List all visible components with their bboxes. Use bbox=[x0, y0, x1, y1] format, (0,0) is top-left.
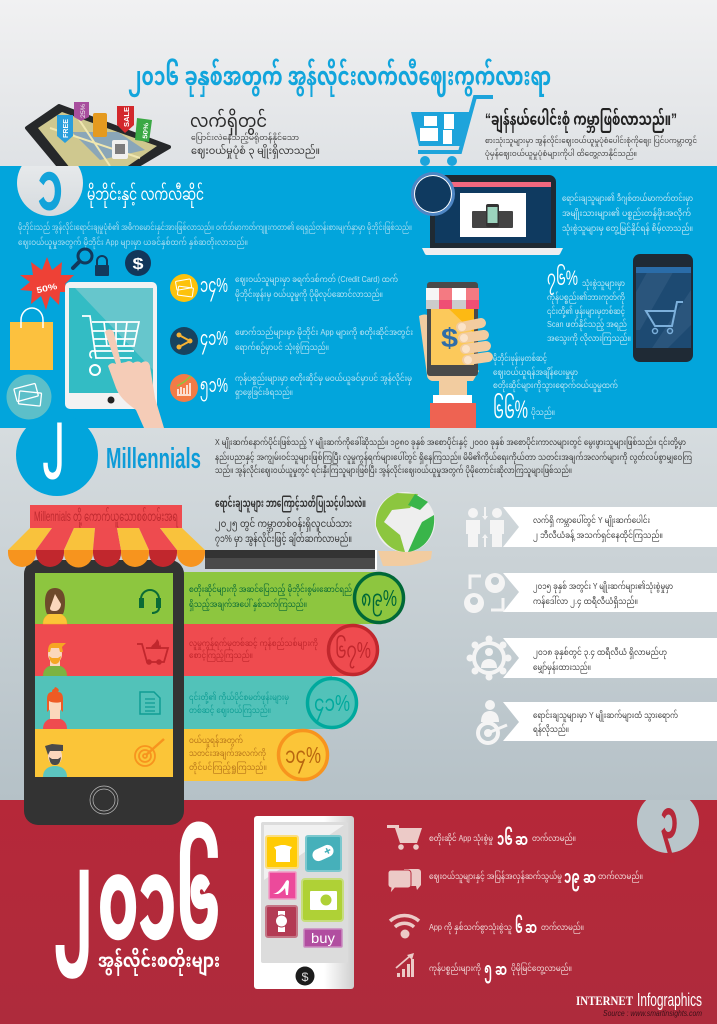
stat: 66 percent: စတိုးဆိုင်များကိုသွားရောက်ဝယ်ယူမှုထက် bbox=[493, 378, 618, 393]
fact: 2018 forecast: မျှော်မှန်းထားသည်။ bbox=[533, 661, 591, 675]
stat: 66 percent: ဈေးဝယ်ယူရန်အချိန်ပေးမှုမှာ bbox=[493, 365, 578, 380]
icon: headset bbox=[140, 590, 160, 613]
stat: 66 percent bbox=[493, 351, 618, 424]
awning sign text: Millennials တို့ ကောက်ယူသောစစ်တမ်းအရ bbox=[34, 506, 179, 528]
bar: 14 percent: သတင်းအချက်အလက်ကို bbox=[189, 746, 266, 761]
icon: dollar coin bbox=[125, 250, 151, 276]
panel: millennials bbox=[0, 402, 717, 825]
item: preferred app use: ၆ bbox=[515, 915, 523, 937]
item: customer interaction bbox=[388, 867, 643, 894]
text: omni-channel quote: ပုံမှန်ဈေးဝယ်ယူမှုပုံစံများကိုပါ ထိတွေ့လာနိုင်သည်။ bbox=[485, 148, 637, 160]
stat: 14 percent: ဈေးဝယ်သူများမှာ ခရက်ဒစ်ကတ် (Credit Card) ထက် bbox=[235, 273, 398, 287]
icon: tablet with apps bbox=[254, 816, 354, 989]
stat: 14 percent: ၁၄% bbox=[200, 275, 228, 301]
icon: shop awning bbox=[8, 505, 205, 568]
bar: 41 percent: ၄၁% bbox=[314, 690, 350, 722]
stat: 51 percent: ၅၁% bbox=[200, 375, 228, 401]
item: store app use: ၁၆ bbox=[497, 827, 513, 849]
section number 2: ၂ bbox=[42, 402, 64, 480]
section number 2 bbox=[16, 402, 98, 496]
bar: 41 percent bbox=[173, 676, 356, 729]
icon: tablet with apps: $ bbox=[302, 970, 309, 984]
icon: 50 percent burst: 50% bbox=[35, 281, 59, 295]
app label: buy: buy bbox=[311, 930, 335, 946]
icon: magnifier bbox=[73, 249, 92, 268]
bar: 89 percent: ရှိသည့်အချက်အပေါ် နှစ်သက်ကြသည်။ bbox=[189, 597, 307, 612]
icon: laptop bbox=[411, 172, 563, 255]
text: omni-channel quote bbox=[485, 107, 697, 160]
text: seller digital marketing: အမျိုးသားများ၏ ပစ္စည်းတန်ဖိုးအလိုက် bbox=[562, 206, 691, 221]
avatar: man with grey beard bbox=[43, 744, 67, 777]
section number 3: ၃ bbox=[660, 790, 678, 863]
footer: Internet Infographics logo bbox=[576, 990, 702, 1010]
stat: 14 percent: မိုဘိုင်းဖုန်းမှ ဝယ်ယူမှုကို ပိုမိုလုပ်ဆောင်လာသည်။ bbox=[235, 287, 383, 301]
icon: tablet with cart bbox=[65, 282, 157, 409]
bar: 89 percent: ၈၉% bbox=[361, 585, 397, 617]
stat: 76 percent: ၇၆% bbox=[547, 263, 578, 295]
stat: 66 percent: ၆၆% bbox=[493, 392, 528, 424]
big year: ၂ bbox=[54, 835, 92, 978]
icon: phone with shopping tags: SALE bbox=[124, 107, 131, 127]
item: customer interaction: တက်လာမည်။ bbox=[598, 870, 643, 883]
bar: 67 percent bbox=[173, 624, 378, 676]
bar: 67 percent: လူမှုကွန်ရက်မှတစ်ဆင့် ကုန်စည်သစ်များကို bbox=[189, 636, 318, 651]
stat: 76 percent bbox=[547, 263, 631, 345]
stat: 51 percent bbox=[170, 371, 412, 402]
icon: phone with shopping tags: 50% bbox=[142, 122, 150, 139]
item: preferred app use: App ကို နှစ်သက်စွာသုံးစွဲသူ bbox=[429, 920, 512, 934]
panel: online stores 2016 bbox=[0, 786, 717, 1024]
stat: 51 percent: ရှာဖွေခြင်းခံရသည်။ bbox=[235, 386, 293, 399]
heading: mobile and retail: မိုဘိုင်းနှင့် လက်လီဆိုင် bbox=[87, 183, 204, 209]
text: current trends: ဈေးဝယ်မှုပုံစံ ၃ မျိုးရှိလာသည်။ bbox=[191, 143, 320, 159]
icon: shopping bag bbox=[10, 308, 53, 370]
bar: 14 percent: ဝယ်ယူရန်အတွက် bbox=[189, 734, 243, 747]
text: why sellers should care: ရောင်းချသူများ ဘာကြောင့်သတိပြုသင့်ပါသလဲ။ bbox=[215, 493, 366, 514]
bar: 14 percent bbox=[173, 729, 328, 781]
icon: dollar coin: $ bbox=[132, 256, 144, 273]
bar: 41 percent: ၎င်းတို့၏ ကိုယ်ပိုင်စမတ်ဖုန်းများမှ bbox=[189, 690, 289, 705]
icon: lock bbox=[95, 256, 109, 276]
avatar: woman with red hair bbox=[43, 687, 67, 729]
icon: checklist bbox=[140, 692, 160, 714]
fact: 2015 spending bbox=[464, 573, 717, 613]
item: product views bbox=[396, 953, 572, 983]
fact: 2015 spending: ကန်ဒေါ်လာ ၂.၄ ထရီလီယံရှိသည်။ bbox=[533, 594, 638, 608]
item: store app use: စတိုးဆိုင် App သုံးစွဲမှု bbox=[429, 831, 493, 845]
intro text bbox=[215, 435, 692, 478]
text: seller digital marketing: သုံးစွဲသူများမှ တွေ့မြင်နိုင်ရန် စိမ့်လာသည်။ bbox=[562, 221, 693, 236]
fact: reach generation Y: ရန်လိုသည်။ bbox=[533, 722, 569, 736]
icon: pointing hand bbox=[105, 329, 164, 428]
fact: two billion bbox=[466, 507, 717, 547]
item: product views: ပိုမိုမြင်တွေ့လာမည်။ bbox=[511, 961, 572, 975]
text: current trends bbox=[190, 107, 320, 159]
fact: 2018 forecast bbox=[466, 636, 717, 680]
stat: 76 percent: Scan ဖတ်နိုင်သည့် အရည် bbox=[547, 317, 627, 331]
stat: 14 percent bbox=[170, 273, 398, 302]
icon: smartphone with cart bbox=[633, 254, 693, 362]
stat: 76 percent: ကုန်ပစ္စည်း၏ဘားကုတ်ကို bbox=[547, 290, 625, 304]
heading: Millennials: Millennials bbox=[106, 443, 201, 475]
avatar: woman with headset bbox=[43, 588, 67, 624]
stat: 76 percent: ၎င်းတို့၏ ဖုန်းများမှတစ်ဆင့် bbox=[547, 304, 625, 319]
fact: reach generation Y bbox=[476, 700, 717, 745]
icon: big phone with survey bbox=[24, 550, 404, 825]
stat: 41 percent: ရောက်စဉ်မှာပင် သုံးစွဲကြသည်။ bbox=[235, 341, 329, 354]
fact: reach generation Y: ရောင်းချသူများမှာ Y မျိုးဆက်များထံ သွားရောက် bbox=[533, 708, 678, 723]
text: why sellers should care: ၇၁% မှာ အွန်လိုင်းဖြင့် ချိတ်ဆက်လာမည်။ bbox=[215, 531, 352, 547]
item: preferred app use: ဆ bbox=[525, 920, 537, 937]
icon: phone with shopping tags: FREE bbox=[63, 119, 70, 138]
intro text: သည်။ အွန်လိုင်းဈေးဝယ်ယူမှုတွင် ရင်းနှီးကြသူများဖြစ်ပြီး အွန်လိုင်းဈေးဝယ်ယူမှုအတွက် ပိုမိုတောင်းဆိုလာကြသူများဖြစ်သည်။ bbox=[215, 463, 572, 478]
stat: 76 percent: အသွေးကို လိုလားကြသည်။ bbox=[547, 331, 631, 345]
icon: phone with shopping tags bbox=[27, 102, 169, 170]
icon: hand holding store phone bbox=[419, 282, 488, 428]
icon: shopping cart bbox=[411, 97, 493, 166]
item: customer interaction: ၁၉ bbox=[564, 867, 580, 891]
text: current trends: လက်ရှိတွင် bbox=[190, 107, 267, 136]
bar: 14 percent: ၁၄% bbox=[285, 742, 321, 774]
stat: 41 percent: ၄၁% bbox=[200, 328, 228, 354]
icon: credit cards bbox=[6, 374, 52, 420]
stat: 66 percent: မိုဘိုင်းဖုန်းမှတစ်ဆင့် bbox=[493, 351, 547, 365]
item: preferred app use: တက်လာမည်။ bbox=[541, 921, 584, 934]
text: omni-channel quote: စားသုံးသူများမှာ အွန်လိုင်းဈေးဝယ်ယူမှုပုံစံပေါင်းစုံကိုဈေး ပြင်ပကမ္ဘာတွင် bbox=[485, 135, 697, 147]
text: current trends: ပြောင်းလဲနေသည့်မရိုတန်နိုင်သော bbox=[191, 132, 299, 144]
text: seller digital marketing bbox=[562, 191, 693, 236]
bar: 67 percent: ၆၇% bbox=[335, 634, 371, 669]
title: ၂၀၁၆ ခုနှစ်အတွက် အွန်လိုင်းလက်လီဈေးကွက်လားရာ bbox=[128, 57, 551, 98]
item: store app use bbox=[387, 825, 576, 850]
panel: header bbox=[0, 0, 717, 170]
item: product views: ဆ bbox=[495, 962, 507, 979]
item: store app use: ဆ bbox=[515, 832, 528, 849]
fact: 2018 forecast: ၂၀၁၈ ခုနှစ်တွင် ၃.၄ ထရီလီယံ ရှိလာမည်ဟု bbox=[533, 645, 667, 659]
item: customer interaction: ဆ bbox=[583, 870, 596, 887]
text: why sellers should care bbox=[215, 493, 366, 547]
stat: 41 percent bbox=[170, 325, 413, 355]
bar: 67 percent: စောင့်ကြည့်ကြသည်။ bbox=[189, 649, 253, 662]
big year bbox=[54, 824, 222, 978]
section number 3 bbox=[637, 800, 699, 853]
bar: 41 percent: တစ်ဆင့် ဈေးဝယ်ကြသည်။ bbox=[189, 704, 271, 717]
fact: two billion: ၂ ဘီလီယံခန့် အသက်ရှင်နေထိုင်ကြသည်။ bbox=[533, 528, 663, 542]
stat: 41 percent: ဖောက်သည်များမှာ မိုဘိုင်း App များကို စတိုးဆိုင်အတွင်း bbox=[235, 325, 413, 340]
item: product views: ကုန်ပစ္စည်းများကို bbox=[429, 961, 481, 976]
icon: cart with flame bbox=[137, 639, 168, 665]
stat: 51 percent: ကုန်ပစ္စည်းများမှာ စတိုးဆိုင်မှ မဝယ်ယူခင်မှာပင် အွန်လိုင်းမှ bbox=[235, 371, 412, 386]
heading: online stores: အွန်လိုင်းစတိုးများ bbox=[98, 947, 220, 977]
intro text: ဈေးဝယ်ယူမှုအတွက် မိုဘိုင်း App များမှာ ယခင်နှစ်ထက် နှစ်ဆတိုးလာသည်။ bbox=[18, 235, 248, 250]
big year: ၀၁၆ bbox=[98, 824, 222, 962]
bar: 89 percent: စတိုးဆိုင်များကို အဆင်ပြေသည့် မိုဘိုင်းစွမ်းဆောင်ရည် bbox=[189, 582, 352, 597]
stat: 76 percent: သုံးစွဲသူများမှာ bbox=[582, 278, 625, 291]
section number 1: ၁ bbox=[37, 149, 63, 225]
fact: 2015 spending: ၂၀၁၅ ခုနှစ် အတွင်း Y မျိုးဆက်များ၏သုံးစွဲမှုမှာ bbox=[533, 579, 673, 594]
icon: globe in hand bbox=[375, 492, 435, 566]
section number 1 bbox=[17, 166, 83, 216]
fact: two billion: လက်ရှိ ကမ္ဘာပေါ်တွင် Y မျိုးဆက်ပေါင်း bbox=[533, 513, 650, 528]
item: product views: ၅ bbox=[484, 959, 492, 983]
footer: Internet Infographics logo: INTERNET bbox=[576, 993, 633, 1008]
avatar: bearded man bbox=[43, 643, 67, 676]
icon: hand holding store phone: $ bbox=[441, 323, 458, 353]
panel: mobile and retail bbox=[0, 149, 717, 428]
stat: 66 percent: ပိုသည်။ bbox=[531, 405, 555, 419]
item: store app use: တက်လာမည်။ bbox=[532, 832, 576, 845]
text: why sellers should care: ၂၀၂၅ တွင် ကမ္ဘာတစ်ဝန်းရှိလူငယ်သား bbox=[215, 516, 352, 532]
item: customer interaction: ဈေးဝယ်သူများနှင့် အပြန်အလှန်ဆက်သွယ်မှု bbox=[429, 870, 562, 884]
bar: 14 percent: တိုင်ပင်ကြည့်ရှုကြသည်။ bbox=[189, 760, 267, 774]
intro text bbox=[18, 220, 412, 250]
bar: 89 percent bbox=[173, 572, 404, 624]
item: preferred app use bbox=[390, 915, 584, 938]
icon: phone with shopping tags: 25% bbox=[81, 103, 87, 118]
intro text: မိုဘိုင်းသည် အွန်လိုင်းရောင်းချမှုပုံစံ၏ အဓိကမောင်းနှင်အားဖြစ်လာသည်။ ဝက်ဘ်မာကတ်ကျူးကတာ၏ ရေရှည်တန်းစားမျက်နှာမှာ မိုဘိုင်းဖြစ်သည်။ bbox=[18, 220, 412, 235]
icon: 50 percent burst bbox=[20, 257, 74, 310]
icon: target bbox=[135, 739, 164, 766]
